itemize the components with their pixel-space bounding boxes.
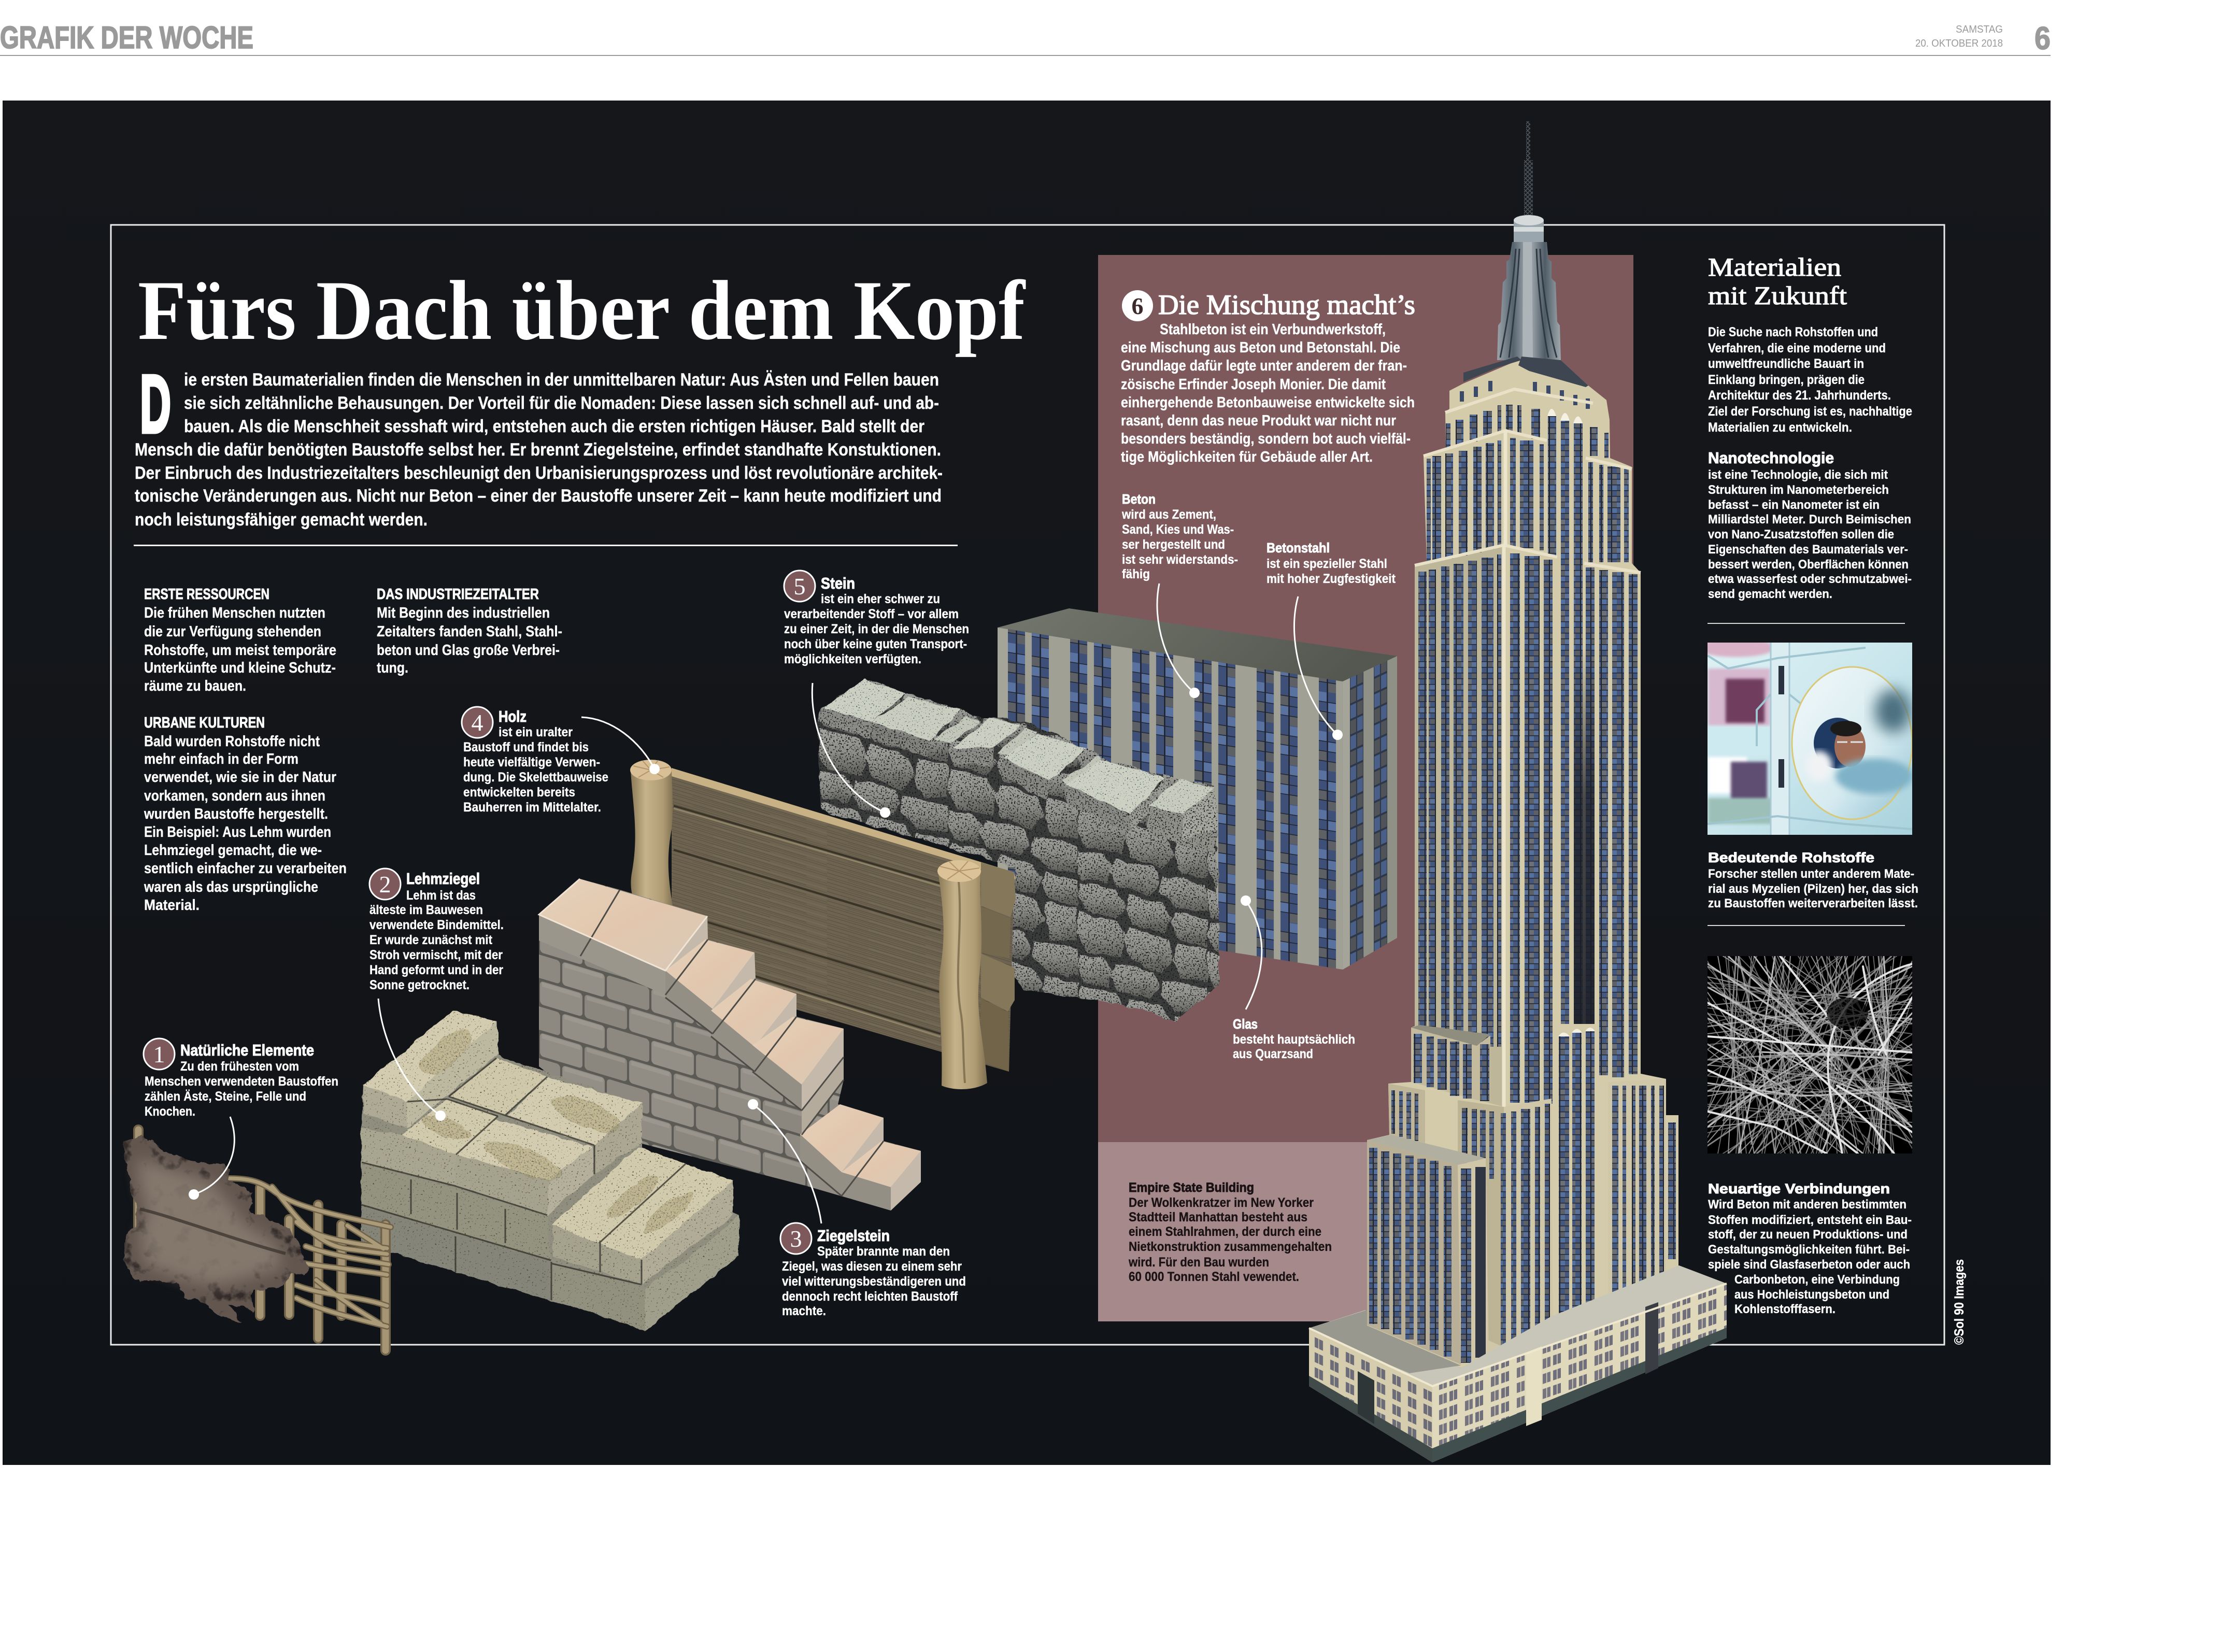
callout 4: Holz: entwickelten bereits xyxy=(463,785,575,800)
callout 3: Ziegelstein: 3 xyxy=(790,1226,802,1252)
panel: Die Mischung macht's backdrop xyxy=(1098,255,1633,1142)
text block: Neuartige Verbindungen: Wird Beton mit anderen bestimmten xyxy=(1708,1198,1906,1212)
text block: Neuartige Verbindungen: Neuartige Verbindungen xyxy=(1708,1181,1890,1197)
text block: Urbane Kulturen: vorkamen, sondern aus ihnen xyxy=(144,788,325,804)
callout 5: Stein: zu einer Zeit, in der die Menschen xyxy=(784,622,969,636)
callout 5: Stein: ist ein eher schwer zu xyxy=(821,592,940,606)
tier 2 windows xyxy=(1446,405,1609,458)
text block: Empire State Building: Empire State Building xyxy=(1129,1180,1254,1195)
panel: Empire State Building backdrop xyxy=(1098,1142,1388,1321)
heading and text: Die Mischung macht's: eine Mischung aus Beton und Betonstahl. Die xyxy=(1121,339,1400,356)
callout 1: Natürliche Elemente: Menschen verwendeten Baustoffen xyxy=(145,1074,338,1089)
intro text: bauen. Als die Menschheit sesshaft wird, entstehen auch die ersten richtigen Häuser. Bald stellt der xyxy=(184,417,924,436)
base building xyxy=(1309,1265,1727,1462)
intro text: sie sich zeltähnliche Behausungen. Der Vorteil für die Nomaden: Diese lassen sich schnell auf- und ab- xyxy=(184,393,939,413)
illustration: branch fence xyxy=(138,1130,391,1350)
text block: Empire State Building: wird. Für den Bau wurden xyxy=(1128,1255,1269,1270)
text block: Neuartige Verbindungen xyxy=(1708,1181,1912,1316)
text block: Nanotechnologie xyxy=(1707,449,1912,624)
text block: Urbane Kulturen: mehr einfach in der Form xyxy=(144,751,298,767)
setback small left xyxy=(1388,1084,1425,1143)
setback right xyxy=(1608,1079,1676,1314)
callout: Betonstahl: ist ein spezieller Stahl xyxy=(1267,557,1387,571)
heading and text: Die Mischung macht's: 6 xyxy=(1132,293,1143,319)
text block: Bedeutende Rohstoffe: rial aus Myzelien (Pilzen) her, das sich xyxy=(1708,882,1918,896)
callout 3: Ziegelstein: Ziegelstein xyxy=(817,1227,890,1245)
tier 3 windows xyxy=(1427,438,1629,562)
text block: Das Industriezeitalter xyxy=(377,586,562,676)
callout 2: Lehmziegel: verwendete Bindemittel. xyxy=(369,918,504,932)
heading and text: Die Mischung macht's: rasant, denn das neue Produkt war nicht nur xyxy=(1121,412,1396,429)
callout 1: Natürliche Elemente xyxy=(144,1038,338,1200)
text block: Empire State Building: Stadtteil Manhattan besteht aus xyxy=(1129,1210,1307,1224)
title: Fürs Dach über dem Kopf xyxy=(138,264,1026,358)
callout: Betonstahl: Betonstahl xyxy=(1267,540,1330,556)
heading and text: Die Mischung macht's: Stahlbeton ist ein Verbundwerkstoff, xyxy=(1160,321,1386,338)
illustration: clay bricks stack xyxy=(361,1010,739,1331)
callout 5: Stein: noch über keine guten Transport- xyxy=(784,637,967,651)
callout 5: Stein: Stein xyxy=(821,574,855,592)
lower left block xyxy=(1367,1135,1489,1364)
illustration: stone wall xyxy=(818,679,1219,1022)
text block: Das Industriezeitalter: tung. xyxy=(377,660,408,676)
text block: Urbane Kulturen: Ein Beispiel: Aus Lehm wurden xyxy=(144,824,331,841)
intro text xyxy=(134,359,958,546)
callout 2: Lehmziegel: Sonne getrocknet. xyxy=(369,978,469,992)
intro text: noch leistungsfähiger gemacht werden. xyxy=(135,510,428,530)
text block: Urbane Kulturen: Bald wurden Rohstoffe nicht xyxy=(144,733,320,750)
intro text: tonische Veränderungen aus. Nicht nur Beton – einer der Baustoffe unserer Zeit – kann heute modifiziert und xyxy=(135,486,942,506)
text block: Bedeutende Rohstoffe: Forscher stellen unter anderem Mate- xyxy=(1708,867,1914,881)
text block: Erste Ressourcen: Unterkünfte und kleine Schutz- xyxy=(144,660,336,676)
text block: Urbane Kulturen: URBANE KULTUREN xyxy=(144,715,265,731)
text block: Materialien intro: Ziel der Forschung ist es, nachhaltige xyxy=(1708,404,1912,419)
callout 4: Holz: dung. Die Skelettbauweise xyxy=(463,770,608,785)
callout 1: Natürliche Elemente: Knochen. xyxy=(145,1104,195,1119)
heading: Materialien mit Zukunft: Materialien xyxy=(1708,252,1841,281)
text block: Erste Ressourcen xyxy=(144,586,336,694)
callout 5: Stein xyxy=(784,571,969,818)
text block: Neuartige Verbindungen: Stoffen modifiziert, entsteht ein Bau- xyxy=(1708,1213,1912,1227)
intro text: Der Einbruch des Industriezeitalters beschleunigt den Urbanisierungsprozess und löst revolutionäre architek- xyxy=(135,463,943,483)
left face shade xyxy=(1411,545,1504,1107)
text block: Nanotechnologie: ist eine Technologie, die sich mit xyxy=(1708,468,1888,482)
callout: Glas xyxy=(1233,895,1355,1061)
text block: Erste Ressourcen: räume zu bauen. xyxy=(144,678,246,694)
callout: Betonstahl xyxy=(1267,540,1396,740)
intro text: Mensch die dafür benötigten Baustoffe selbst her. Er brennt Ziegelsteine, erfindet standhafte Konstuktionen. xyxy=(135,440,941,460)
white frame xyxy=(111,225,1944,1345)
callout 4: Holz xyxy=(462,707,660,815)
text block: Urbane Kulturen: Lehmziegel gemacht, die we- xyxy=(144,842,322,859)
text block: Neuartige Verbindungen: Gestaltungsmöglichkeiten führt. Bei- xyxy=(1708,1243,1910,1257)
text block: Materialien intro xyxy=(1708,325,1912,435)
intro text: D xyxy=(140,359,171,450)
text block: Urbane Kulturen: sentlich einfacher zu verarbeiten xyxy=(144,860,347,877)
text block: Urbane Kulturen: Material. xyxy=(144,897,200,914)
text block: Erste Ressourcen: Rohstoffe, um meist temporäre xyxy=(144,642,336,659)
callout: Beton: Beton xyxy=(1122,491,1156,507)
text block: Nanotechnologie: etwa wasserfest oder schmutzabwei- xyxy=(1708,572,1912,586)
text block: Empire State Building: 60 000 Tonnen Stahl vewendet. xyxy=(1129,1270,1299,1284)
setback middle xyxy=(1458,1099,1553,1363)
text block: Materialien intro: Verfahren, die eine moderne und xyxy=(1708,341,1886,355)
header: Grafik der Woche xyxy=(0,20,2051,56)
callout 3: Ziegelstein: dennoch recht leichten Baustoff xyxy=(782,1289,958,1304)
text block: Materialien intro: Materialien zu entwickeln. xyxy=(1708,420,1852,435)
text block: Urbane Kulturen: wurden Baustoffe hergestellt. xyxy=(144,806,328,822)
text block: Nanotechnologie: Strukturen im Nanometerbereich xyxy=(1708,483,1889,497)
callout 2: Lehmziegel xyxy=(369,868,504,1121)
callout 2: Lehmziegel: Lehmziegel xyxy=(406,870,480,888)
text block: Bedeutende Rohstoffe: zu Baustoffen weiterverarbeiten lässt. xyxy=(1708,896,1918,910)
text block: Empire State Building xyxy=(1128,1180,1332,1284)
text block: Bedeutende Rohstoffe: Bedeutende Rohstoffe xyxy=(1708,850,1874,865)
photo: researcher behind glass disc xyxy=(1697,638,1913,835)
credit: ©Sol 90 Images xyxy=(1952,1259,1967,1345)
callout 1: Natürliche Elemente: Natürliche Elemente xyxy=(180,1041,314,1059)
tower body xyxy=(1367,360,1678,1368)
callout 4: Holz: Holz xyxy=(499,707,527,725)
callout 3: Ziegelstein: viel witterungsbeständigeren und xyxy=(782,1274,966,1289)
callout: Betonstahl: mit hoher Zugfestigkeit xyxy=(1267,572,1396,586)
callout 1: Natürliche Elemente: 1 xyxy=(153,1041,165,1067)
callout 2: Lehmziegel: Er wurde zunächst mit xyxy=(369,933,493,947)
callout 1: Natürliche Elemente: Zu den frühesten vom xyxy=(180,1059,299,1074)
spire xyxy=(1497,215,1561,360)
text block: Das Industriezeitalter: Zeitalters fanden Stahl, Stahl- xyxy=(377,623,562,640)
callout 1: Natürliche Elemente: zählen Äste, Steine, Felle und xyxy=(145,1089,306,1104)
header: Grafik der Woche: SAMSTAG xyxy=(1956,24,2003,35)
text block: Nanotechnologie: send gemacht werden. xyxy=(1708,587,1832,601)
heading and text: Die Mischung macht's: Grundlage dafür legte unter anderem der fran- xyxy=(1121,358,1407,374)
text block: Das Industriezeitalter: DAS INDUSTRIEZEITALTER xyxy=(377,586,539,603)
callout 5: Stein: möglichkeiten verfügten. xyxy=(784,652,921,666)
heading and text: Die Mischung macht's: Die Mischung macht’s xyxy=(1158,289,1415,320)
callout 3: Ziegelstein: Ziegel, was diesen zu einem sehr xyxy=(782,1259,962,1274)
text block: Neuartige Verbindungen: stoff, der zu neuen Produktions- und xyxy=(1708,1228,1908,1242)
callout 5: Stein: verarbeitender Stoff – vor allem xyxy=(784,607,959,621)
antenna xyxy=(1524,121,1533,216)
tier 4 windows xyxy=(1418,553,1638,1104)
text block: Nanotechnologie: Nanotechnologie xyxy=(1708,449,1834,467)
text block: Erste Ressourcen: die zur Verfügung stehenden xyxy=(144,623,321,640)
callout: Glas: Glas xyxy=(1233,1016,1258,1032)
text block: Empire State Building: einem Stahlrahmen, der durch eine xyxy=(1129,1224,1321,1239)
illustration: animal hide xyxy=(125,1136,309,1325)
heading and text: Die Mischung macht's: zösische Erfinder Joseph Monier. Die damit xyxy=(1121,376,1386,393)
heading and text: Die Mischung macht's xyxy=(1121,289,1415,465)
header: Grafik der Woche: 20. OKTOBER 2018 xyxy=(1915,38,2003,49)
callout 4: Holz: ist ein uralter xyxy=(499,725,573,739)
text block: Materialien intro: Einklang bringen, prägen die xyxy=(1708,373,1865,387)
callout 3: Ziegelstein: machte. xyxy=(782,1304,826,1318)
setback upper left xyxy=(1411,1025,1490,1101)
callout 2: Lehmziegel: älteste im Bauwesen xyxy=(369,903,483,917)
illustration: wooden wall with posts xyxy=(630,760,1016,1089)
callout: Beton: fähig xyxy=(1122,567,1150,581)
centre recess columns xyxy=(1547,409,1595,1327)
intro text: ie ersten Baumaterialien finden die Menschen in der unmittelbaren Natur: Aus Ästen und Fellen bauen xyxy=(184,370,939,390)
ledges xyxy=(1415,389,1641,573)
heading and text: Die Mischung macht's: besonders beständig, sondern bot auch vielfäl- xyxy=(1121,431,1411,447)
text block: Nanotechnologie: von Nano-Zusatzstoffen sollen die xyxy=(1708,528,1894,542)
text block: Neuartige Verbindungen: spiele sind Glasfaserbeton oder auch xyxy=(1708,1258,1910,1272)
callout 4: Holz: Bauherren im Mittelalter. xyxy=(463,800,601,815)
photo: fibres micrograph xyxy=(1707,956,1912,1153)
illustration: concrete slab building xyxy=(998,608,1397,970)
text block: Urbane Kulturen: waren als das ursprüngliche xyxy=(144,879,318,895)
heading and text: Die Mischung macht's: tige Möglichkeiten für Gebäude aller Art. xyxy=(1121,449,1373,465)
dark background panel xyxy=(3,101,2051,1465)
callout: Beton: Sand, Kies und Was- xyxy=(1122,522,1234,537)
text block: Nanotechnologie: befasst – ein Nanometer ist ein xyxy=(1708,498,1880,512)
text block: Erste Ressourcen: ERSTE RESSOURCEN xyxy=(144,586,269,603)
callout 2: Lehmziegel: Stroh vermischt, mit der xyxy=(369,948,503,962)
text block: Materialien intro: Die Suche nach Rohstoffen und xyxy=(1708,325,1878,339)
heading: Materialien mit Zukunft xyxy=(1708,252,1847,310)
crown small windows xyxy=(1460,381,1590,409)
text block: Empire State Building: Der Wolkenkratzer im New Yorker xyxy=(1129,1195,1314,1210)
callout 4: Holz: 4 xyxy=(472,709,483,736)
text block: Urbane Kulturen xyxy=(144,715,347,914)
callout 4: Holz: Baustoff und findet bis xyxy=(463,740,589,754)
callout 5: Stein: 5 xyxy=(794,573,805,600)
text block: Urbane Kulturen: verwendet, wie sie in der Natur xyxy=(144,769,336,786)
text block: Nanotechnologie: Milliardstel Meter. Durch Beimischen xyxy=(1708,512,1911,526)
header: Grafik der Woche: GRAFIK DER WOCHE xyxy=(0,20,253,55)
callout: Glas: aus Quarzsand xyxy=(1233,1047,1313,1061)
text block: Neuartige Verbindungen: Carbonbeton, eine Verbindung xyxy=(1734,1273,1900,1287)
callout 2: Lehmziegel: 2 xyxy=(379,871,391,898)
callout: Beton: ist sehr widerstands- xyxy=(1122,552,1238,567)
callout: Beton xyxy=(1121,491,1238,698)
callout: Glas: besteht hauptsächlich xyxy=(1233,1032,1355,1047)
text block: Materialien intro: umweltfreundliche Bauart in xyxy=(1708,357,1864,371)
callout 3: Ziegelstein: Später brannte man den xyxy=(817,1244,950,1259)
heading: Materialien mit Zukunft: mit Zukunft xyxy=(1708,281,1847,310)
text block: Bedeutende Rohstoffe xyxy=(1707,850,1918,926)
roof terraces xyxy=(1463,357,1588,387)
heading and text: Die Mischung macht's: einhergehende Betonbauweise entwickelte sich xyxy=(1121,394,1415,411)
text block: Das Industriezeitalter: beton und Glas große Verbrei- xyxy=(377,642,560,659)
callout 3: Ziegelstein xyxy=(748,1099,966,1318)
text block: Nanotechnologie: Eigenschaften des Baumaterials ver- xyxy=(1708,543,1908,557)
text block: Materialien intro: Architektur des 21. Jahrhunderts. xyxy=(1708,388,1891,403)
callout: Beton: ser hergestellt und xyxy=(1122,537,1225,552)
text block: Neuartige Verbindungen: aus Hochleistungsbeton und xyxy=(1734,1288,1889,1302)
illustration: fired brick wall xyxy=(539,879,921,1210)
callout 2: Lehmziegel: Lehm ist das xyxy=(406,888,476,903)
text block: Empire State Building: Nietkonstruktion zusammengehalten xyxy=(1129,1240,1332,1254)
text block: Das Industriezeitalter: Mit Beginn des industriellen xyxy=(377,605,550,621)
header: Grafik der Woche: 6 xyxy=(2034,21,2051,56)
callout 4: Holz: heute vielfältige Verwen- xyxy=(463,755,600,770)
callout 2: Lehmziegel: Hand geformt und in der xyxy=(369,963,503,977)
callout: Beton: wird aus Zement, xyxy=(1121,507,1216,522)
illustration: Empire State Building xyxy=(1309,121,1727,1462)
text block: Neuartige Verbindungen: Kohlenstofffasern. xyxy=(1734,1302,1835,1316)
text block: Erste Ressourcen: Die frühen Menschen nutzten xyxy=(144,605,325,621)
text block: Nanotechnologie: bessert werden, Oberflächen können xyxy=(1708,558,1909,572)
